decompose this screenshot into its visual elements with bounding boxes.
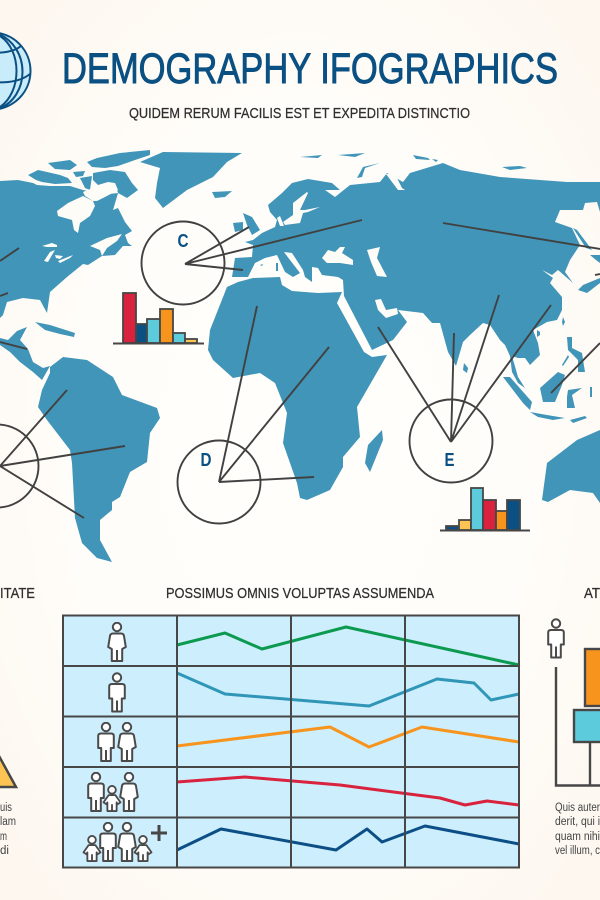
text block: left: lam <box>0 816 16 828</box>
text block: left: uis <box>0 802 12 814</box>
Great Lakes <box>42 243 73 263</box>
label E: E <box>444 450 454 470</box>
Persian Gulf <box>375 299 398 318</box>
islands: Indonesia and Philippines <box>503 337 592 423</box>
island: Madagascar <box>365 430 383 472</box>
label C: C <box>178 231 188 251</box>
island: Iceland <box>212 191 232 198</box>
inland seas and lakes <box>42 174 405 318</box>
islands: Japan and Sakhalin <box>573 228 600 293</box>
world map <box>0 150 600 562</box>
continent: South America <box>38 357 160 562</box>
text block: right <box>555 802 600 857</box>
Black Sea <box>322 247 353 265</box>
icon: person on right chart <box>548 619 564 658</box>
text block: left <box>0 802 16 857</box>
Gulf of St Lawrence <box>90 234 122 256</box>
leader lines entering from the edges <box>0 223 600 393</box>
line chart table <box>63 615 519 868</box>
circle group C <box>142 220 362 304</box>
Hudson Strait <box>83 183 118 201</box>
line: navy <box>177 826 519 850</box>
icon: globe <box>0 32 30 110</box>
islands: Sri Lanka, Taiwan, Hainan <box>463 317 565 373</box>
icon: man <box>109 673 125 712</box>
icon: family with two children plus <box>84 823 167 861</box>
heading: left section: ITATE <box>0 586 35 602</box>
text block: left: m <box>0 831 7 843</box>
Kara Sea gulf <box>386 174 405 190</box>
circle group D <box>178 306 329 524</box>
Baltic Sea <box>283 192 320 225</box>
continent: Africa <box>208 277 387 500</box>
Hudson Bay <box>57 196 95 233</box>
circle group lower left <box>0 390 125 518</box>
islands: Britain and Ireland <box>233 213 260 235</box>
line: green <box>177 627 519 665</box>
island group: Caribbean <box>35 322 75 337</box>
leader lines and circles <box>0 220 600 524</box>
chart lines <box>177 627 519 850</box>
continent: North America <box>0 180 132 318</box>
text block: left: di <box>0 845 9 857</box>
circle group E <box>378 295 551 482</box>
label D: D <box>200 450 212 470</box>
icon: couple <box>98 723 136 761</box>
table grid <box>63 615 519 868</box>
continent: Eurasia <box>232 163 600 388</box>
icon: woman <box>108 623 126 661</box>
Kattegat <box>277 216 284 226</box>
icon: family with one child <box>88 773 138 811</box>
Caspian Sea <box>367 247 387 277</box>
continent: Australia <box>542 430 600 503</box>
heading: centre section: POSSIMUS OMNIS VOLUPTAS ASSUMENDA <box>166 586 434 602</box>
bar chart: Atlantic <box>113 293 204 344</box>
continent: Greenland <box>140 152 242 208</box>
subtitle: QUIDEM RERUM FACILIS EST ET EXPEDITA DISTINCTIO <box>129 105 470 122</box>
bar chart: Indian Ocean <box>440 488 530 530</box>
icon: warning triangle <box>0 756 16 787</box>
right box chart <box>556 649 600 786</box>
islands: Arctic Ocean <box>300 153 527 178</box>
line: red <box>177 777 519 805</box>
island group: Arctic Canada <box>28 150 150 198</box>
islands: Mediterranean <box>260 263 278 271</box>
continent: Central America <box>0 327 50 380</box>
line: blue <box>177 673 519 706</box>
line: orange <box>177 727 519 747</box>
